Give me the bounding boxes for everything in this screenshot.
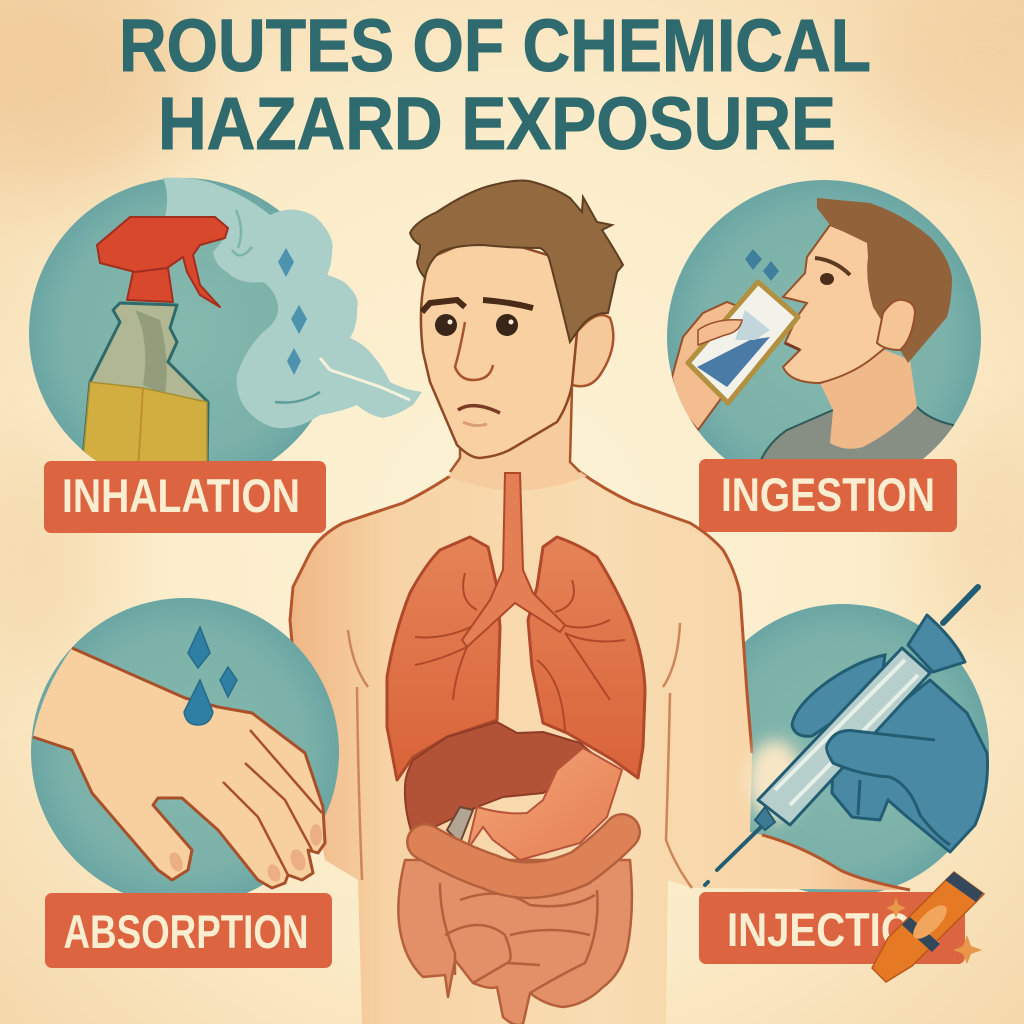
label: absorption: ABSORPTION xyxy=(64,905,308,958)
label: injection: INJECTION xyxy=(727,903,941,956)
intestine mass xyxy=(398,860,632,1024)
hair xyxy=(410,181,623,342)
label: injection xyxy=(699,892,965,964)
panel: ingestion xyxy=(667,180,981,532)
icon: glass xyxy=(688,282,798,403)
label: inhalation: INHALATION xyxy=(62,469,300,522)
panel: inhalation xyxy=(29,178,422,533)
stomach xyxy=(467,748,622,860)
title xyxy=(119,4,871,165)
figure: person xyxy=(290,181,910,1024)
icon: crayon watermark xyxy=(872,872,984,982)
ear xyxy=(877,300,915,350)
trachea xyxy=(462,473,565,647)
left lung xyxy=(387,537,500,780)
icon: gloved hand xyxy=(792,655,988,852)
index finger over barrel xyxy=(827,731,890,777)
circle background: inhalation xyxy=(29,178,339,488)
gallbladder xyxy=(447,807,473,843)
circle background: absorption xyxy=(31,598,339,906)
icon: spray bottle xyxy=(82,303,208,470)
circle background: ingestion xyxy=(667,180,981,494)
illustration: man drinking xyxy=(672,198,960,470)
fingers over glass xyxy=(698,320,742,345)
head xyxy=(421,235,577,458)
lips xyxy=(785,343,800,350)
icon: vapor cloud xyxy=(163,178,422,428)
loops xyxy=(440,883,598,993)
thumb xyxy=(792,655,885,736)
hair xyxy=(817,198,952,363)
torso and arms xyxy=(290,468,910,1024)
title: ROUTES OF CHEMICAL xyxy=(119,4,871,87)
icon: syringe xyxy=(705,587,978,885)
body outline xyxy=(290,468,910,890)
ear xyxy=(572,315,613,386)
arm creases xyxy=(348,623,692,888)
icon: spray trigger xyxy=(97,217,228,307)
panel: injection xyxy=(699,587,988,964)
bronchi xyxy=(415,573,625,733)
label: ingestion xyxy=(699,459,957,532)
face xyxy=(422,300,533,426)
finger creases xyxy=(858,735,950,845)
illustration: hand xyxy=(33,648,325,888)
label: ingestion: INGESTION xyxy=(721,468,935,521)
icon: droplets xyxy=(184,627,237,725)
pale wash xyxy=(747,740,803,820)
intestines xyxy=(398,860,632,1024)
liver xyxy=(405,722,600,837)
face xyxy=(783,225,895,383)
finger outline xyxy=(827,731,890,777)
panel: absorption xyxy=(31,598,339,968)
right lung xyxy=(528,537,645,778)
title: HAZARD EXPOSURE xyxy=(158,82,836,165)
circle background: injection xyxy=(697,604,989,896)
arm and hand xyxy=(672,300,736,432)
palm xyxy=(827,680,988,852)
label: absorption xyxy=(45,893,332,968)
brow and eye xyxy=(815,258,850,275)
icon: droplets xyxy=(745,249,779,281)
neck xyxy=(820,340,917,449)
icon: droplets xyxy=(278,248,307,375)
label: inhalation xyxy=(44,461,326,533)
colon band xyxy=(425,832,622,880)
neck xyxy=(448,380,587,490)
shirt xyxy=(760,406,954,459)
